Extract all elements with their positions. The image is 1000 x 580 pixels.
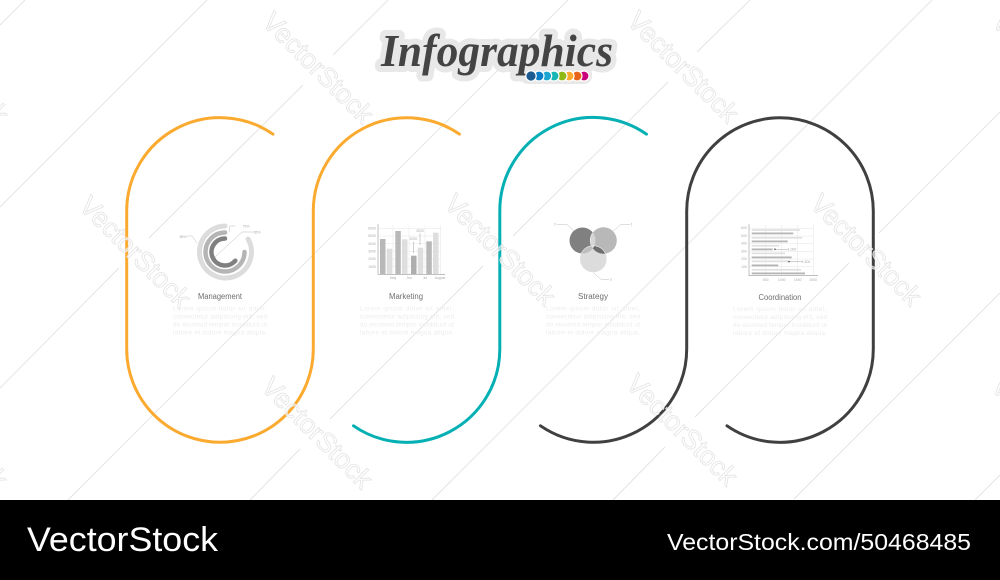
text block: Marketing bbox=[360, 306, 454, 336]
venn diagram: 2 bbox=[554, 222, 556, 226]
radial donut chart: 75% bbox=[243, 224, 249, 228]
horizontal bar chart: 500 bbox=[741, 234, 747, 238]
watermarks: VectorStock bbox=[438, 188, 562, 312]
teal S-curve outline (panels 2 and 3) bbox=[354, 117, 646, 442]
text block: Strategy: labore et dolore magna aliqua. bbox=[546, 330, 640, 336]
text block: Management: do eiusmod tempor incididunt ut bbox=[173, 322, 267, 328]
horizontal bar chart: 300 bbox=[741, 250, 747, 254]
text block: Coordination: Lorem ipsum dolor sit amet, bbox=[733, 306, 827, 313]
text block: Marketing: consectetur adipiscing elit, sed bbox=[360, 314, 454, 320]
orange S-curve outline (panels 1 and 2) bbox=[127, 118, 459, 442]
horizontal bar chart: 600 bbox=[741, 226, 747, 230]
bar chart: May bbox=[390, 276, 397, 280]
bar chart: 6000 bbox=[368, 226, 376, 230]
footer brand: VectorStock bbox=[27, 521, 219, 559]
bar chart: August bbox=[435, 276, 445, 280]
panel: Coordination bbox=[733, 224, 827, 337]
text block: Coordination bbox=[733, 306, 827, 337]
radial donut chart bbox=[180, 224, 260, 278]
horizontal bar chart: 200 bbox=[741, 257, 747, 261]
text block: Strategy bbox=[546, 306, 640, 336]
text block: Management: Lorem ipsum dolor sit amet, bbox=[173, 306, 267, 312]
heading: Marketing: Marketing bbox=[389, 292, 423, 301]
horizontal bar chart: 1,000 bbox=[788, 248, 796, 252]
radial donut chart: 85% bbox=[180, 235, 186, 239]
footer image id: VectorStock.com/50468485 bbox=[667, 529, 971, 555]
text block: Marketing: labore et dolore magna aliqua. bbox=[360, 330, 454, 336]
venn diagram: 3 bbox=[610, 278, 612, 282]
footer bar bbox=[0, 500, 1000, 580]
bar chart: 1000 bbox=[368, 265, 376, 269]
bar chart: Jun bbox=[407, 276, 412, 280]
horizontal bar chart: 1,500 bbox=[802, 260, 810, 264]
heading: Coordination: Coordination bbox=[758, 293, 802, 302]
bar chart: 5000 bbox=[368, 234, 376, 238]
watermarks: VectorStock bbox=[73, 190, 197, 314]
venn diagram: 1 bbox=[631, 222, 633, 226]
horizontal bar chart: 2000 bbox=[810, 278, 817, 282]
colour dots under title bbox=[526, 71, 589, 81]
text block: Marketing: Lorem ipsum dolor sit amet, bbox=[360, 306, 454, 312]
text block: Strategy: Lorem ipsum dolor sit amet, bbox=[546, 306, 640, 312]
venn diagram bbox=[554, 222, 633, 282]
horizontal bar chart: 500 bbox=[763, 278, 769, 282]
bar chart: 4000 bbox=[368, 242, 376, 246]
radial donut chart: 65% bbox=[254, 230, 260, 234]
bar chart: 3000 bbox=[416, 229, 424, 233]
bar chart: Jul bbox=[423, 276, 427, 280]
horizontal bar chart: 100 bbox=[741, 265, 747, 269]
bar chart: 2000 bbox=[368, 257, 376, 261]
horizontal bar chart bbox=[741, 224, 818, 282]
dark S-curve outline (panels 3 and 4) bbox=[540, 118, 873, 442]
watermarks: VectorStock bbox=[255, 371, 379, 495]
horizontal bar chart: 1000 bbox=[778, 278, 786, 282]
watermarks: VectorStock bbox=[620, 368, 744, 492]
title: Infographics: Infographics bbox=[380, 25, 613, 76]
heading: Strategy: Strategy bbox=[578, 292, 608, 301]
watermarks: VectorStock bbox=[256, 6, 380, 130]
watermarks: VectorStock bbox=[804, 188, 928, 312]
text block: Management: consectetur adipiscing elit, sed bbox=[173, 314, 267, 320]
watermarks: VectorStock bbox=[621, 5, 745, 129]
bar chart bbox=[368, 224, 445, 280]
panel: Strategy bbox=[546, 222, 640, 336]
bar chart: 2000 bbox=[410, 237, 417, 241]
text block: Coordination: labore et dolore magna aliqua. bbox=[733, 330, 827, 337]
panel: Marketing bbox=[360, 224, 454, 336]
heading: Management: Management bbox=[198, 292, 243, 301]
text block: Coordination: do eiusmod tempor incididunt ut bbox=[733, 322, 827, 329]
text block: Strategy: consectetur adipiscing elit, sed bbox=[546, 314, 640, 320]
text block: Management bbox=[173, 306, 267, 336]
text block: Management: labore et dolore magna aliqua. bbox=[173, 330, 267, 336]
bar chart: 3000 bbox=[368, 250, 376, 254]
text block: Strategy: do eiusmod tempor incididunt ut bbox=[546, 322, 640, 328]
panel: Management bbox=[173, 224, 267, 336]
horizontal bar chart: 1500 bbox=[794, 278, 802, 282]
text block: Coordination: consectetur adipiscing elit, sed bbox=[733, 314, 827, 321]
horizontal bar chart: 400 bbox=[741, 242, 747, 246]
text block: Marketing: do eiusmod tempor incididunt ut bbox=[360, 322, 454, 328]
title: Infographics: Infographics bbox=[380, 25, 613, 76]
